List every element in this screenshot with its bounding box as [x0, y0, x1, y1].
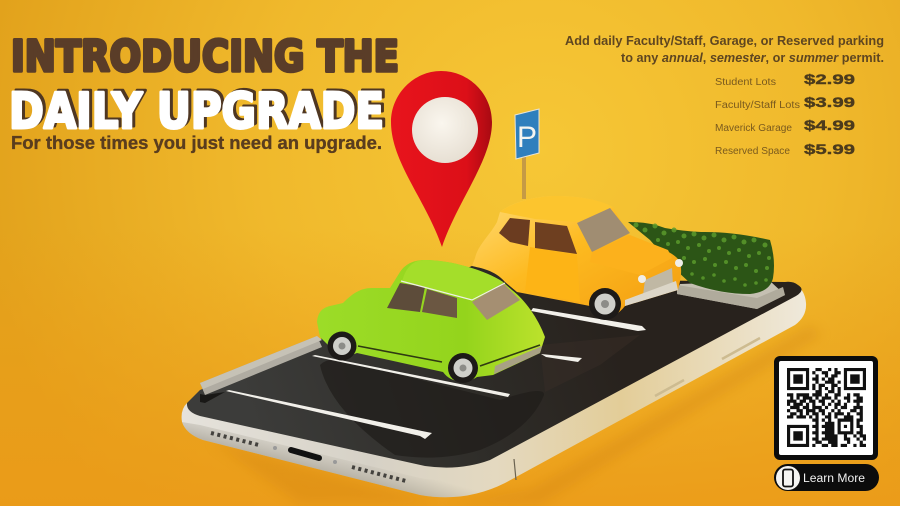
wheels — [328, 332, 356, 360]
location pin — [391, 71, 492, 247]
row: maverick garage: $4.99 — [804, 117, 855, 133]
car reflection — [320, 359, 544, 458]
row: student lots — [715, 71, 855, 88]
windows — [499, 218, 530, 246]
row: reserved space — [715, 141, 855, 157]
row: maverick garage — [715, 117, 855, 134]
roof — [402, 260, 503, 300]
phone screen — [187, 262, 802, 468]
row: reserved space: $5.99 — [804, 141, 855, 157]
body — [317, 260, 545, 382]
wheel — [589, 288, 621, 320]
body — [472, 196, 681, 318]
learn more button: Learn More — [803, 473, 865, 485]
row: maverick garage: Maverick Garage — [715, 123, 792, 134]
parking lines — [226, 308, 646, 439]
rear bumper — [494, 346, 542, 374]
parking sign — [515, 109, 539, 199]
charge port and speakers — [211, 433, 406, 481]
title line 2: DAILY UPGRADE — [12, 81, 387, 138]
price table — [715, 71, 855, 157]
hedge — [628, 222, 774, 294]
grille and bumper — [643, 268, 673, 295]
row: student lots: Student Lots — [715, 77, 776, 88]
QR code — [774, 356, 878, 460]
parking sign: P — [517, 121, 537, 154]
learn more button — [774, 464, 879, 491]
row: faculty staff lots: Faculty/Staff Lots — [715, 100, 800, 111]
windows — [387, 283, 425, 312]
pin white circle — [412, 97, 478, 163]
title line 1: INTRODUCING THE — [11, 32, 399, 82]
row: faculty staff lots: $3.99 — [804, 94, 855, 110]
green car — [317, 260, 545, 383]
hood — [590, 235, 672, 275]
row: faculty staff lots — [715, 94, 855, 111]
yellow car — [472, 196, 683, 320]
door panel — [525, 247, 580, 302]
row: reserved space: Reserved Space — [715, 146, 790, 157]
side buttons — [655, 338, 760, 396]
phone shadow — [210, 325, 822, 504]
icon: phone — [776, 466, 800, 490]
curb right — [677, 281, 785, 309]
phone body — [182, 284, 806, 497]
roof — [500, 196, 613, 222]
row: student lots: $2.99 — [804, 71, 855, 87]
tagline: For those times you just need an upgrade. — [11, 133, 382, 153]
curb left — [200, 336, 322, 403]
title line 2: DAILY UPGRADE — [9, 83, 384, 140]
title — [9, 32, 399, 153]
side stripe — [358, 345, 540, 366]
phone — [182, 262, 822, 504]
permit description: Add daily Faculty/Staff, Garage, or Reserved parking — [565, 34, 884, 48]
permit description: to any annual, semester, or summer permit. — [621, 51, 883, 65]
